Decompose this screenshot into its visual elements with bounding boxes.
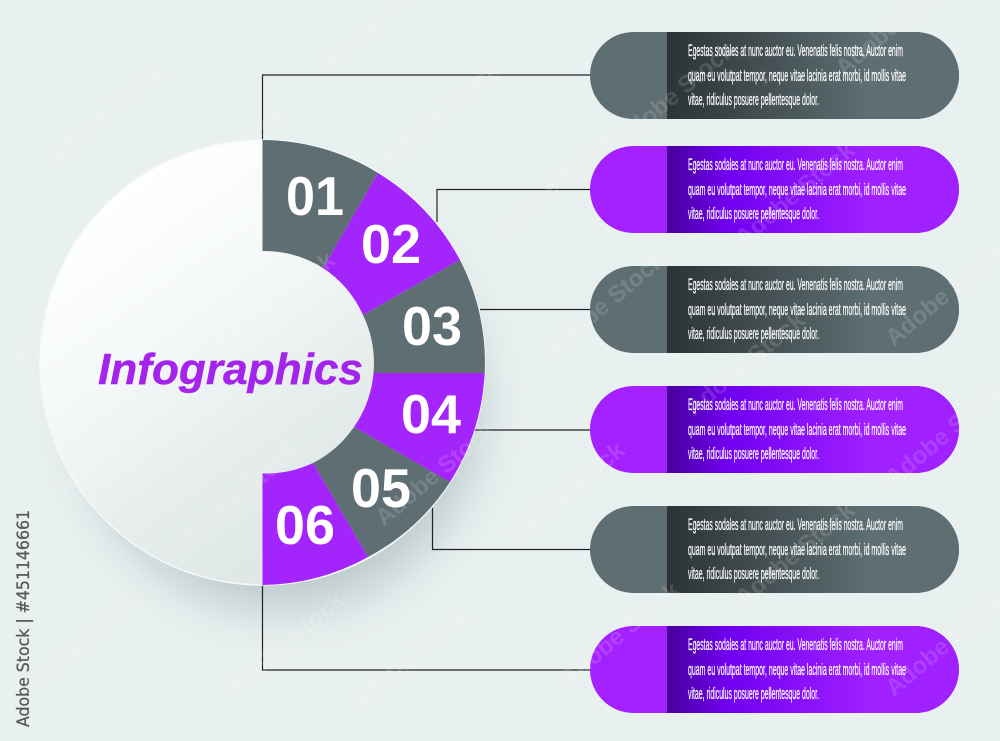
watermarks: Adobe Stock <box>370 416 501 532</box>
watermarks: Adobe Stock <box>175 436 306 552</box>
segment 03 <box>363 260 485 373</box>
pill 5: vitae, ridiculus posuere pellentesque dolor. <box>688 564 819 583</box>
watermarks: Adobe Stock <box>210 246 341 362</box>
segment numbers: 02 <box>361 213 421 275</box>
watermarks: Adobe Stock <box>540 246 671 362</box>
watermarks: Adobe Stock <box>680 306 811 422</box>
disc shadow <box>80 200 480 610</box>
pill 2 <box>590 146 959 233</box>
watermarks: Adobe Stock <box>555 576 686 692</box>
connector lines <box>262 75 590 670</box>
pill 5 <box>590 506 959 593</box>
watermarks: Adobe Stock <box>375 56 506 172</box>
segment 02 <box>323 173 460 315</box>
watermarks: Adobe Stock <box>610 36 741 152</box>
pill 1: vitae, ridiculus posuere pellentesque dolor. <box>688 90 819 109</box>
watermarks: Adobe Stock <box>490 126 621 242</box>
watermarks: Adobe Stock <box>160 101 291 217</box>
pill 3: vitae, ridiculus posuere pellentesque dolor. <box>688 324 819 343</box>
watermarks: Adobe Stock <box>730 136 861 252</box>
pill 1 <box>590 32 959 119</box>
segment numbers: 01 <box>286 165 344 227</box>
pill 3 <box>590 266 959 353</box>
pill 4 <box>590 386 959 473</box>
watermarks: Adobe Stock <box>5 256 136 372</box>
watermarks: Adobe Stock <box>40 56 171 172</box>
segment numbers: 03 <box>402 295 462 357</box>
segment numbers: 05 <box>351 457 411 519</box>
segment 05 <box>313 427 450 557</box>
segment 04 <box>354 373 485 482</box>
watermarks: Adobe Stock <box>15 586 146 702</box>
pill 6: vitae, ridiculus posuere pellentesque dolor. <box>688 684 819 703</box>
title: Infographics <box>98 345 363 394</box>
watermarks: Adobe Stock <box>345 601 476 717</box>
watermarks: Adobe Stock <box>500 436 631 552</box>
segment numbers: 04 <box>401 383 461 445</box>
stock id vertical text: Adobe Stock | #451146661 <box>14 510 34 727</box>
pill 2: vitae, ridiculus posuere pellentesque dolor. <box>688 204 819 223</box>
segment 06 <box>262 463 368 585</box>
pill 4: vitae, ridiculus posuere pellentesque dolor. <box>688 444 819 463</box>
watermarks: Adobe Stock <box>50 386 181 502</box>
segment 01 <box>262 140 378 268</box>
watermarks: Adobe Stock <box>220 586 351 702</box>
segment numbers <box>275 165 462 556</box>
watermarks: Adobe Stock <box>730 496 861 612</box>
pill 6 <box>590 626 959 713</box>
segment numbers: 06 <box>275 494 335 556</box>
main disc <box>40 140 485 585</box>
